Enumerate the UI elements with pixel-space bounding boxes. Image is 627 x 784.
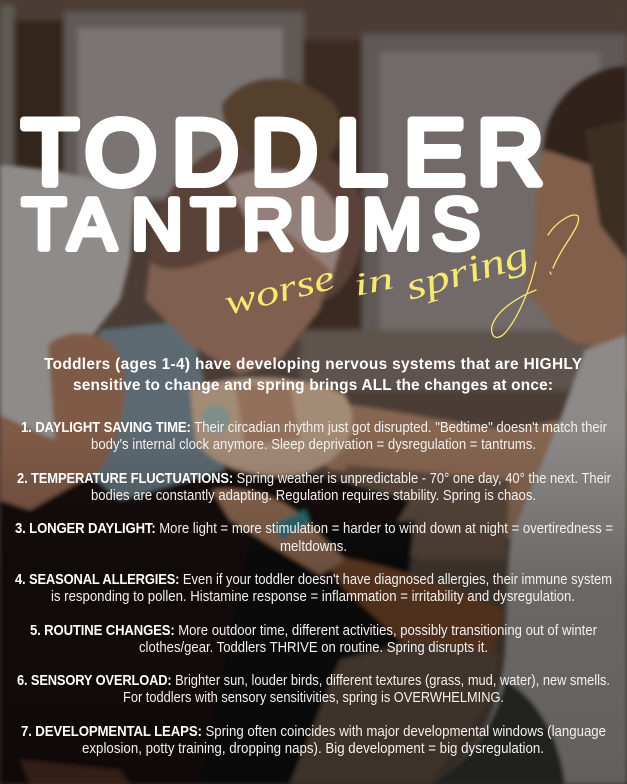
woman's head and hair	[149, 140, 365, 305]
chair and dark lower zone	[0, 450, 410, 784]
intro text: sensitive to change and spring brings ALL the changes at once:	[73, 377, 553, 394]
item 5: routine changes: 5. ROUTINE CHANGES: More outdoor time, different activities, possibly transitioning out of winter	[30, 623, 597, 639]
item 4: seasonal allergies	[15, 572, 612, 605]
title line: TODDLER: TODDLER	[22, 102, 543, 204]
item 6: sensory overload: For toddlers with sensory sensitivities, spring is OVERWHELMING.	[123, 690, 504, 706]
title line: TANTRUMS: TANTRUMS	[22, 185, 480, 265]
intro text: Toddlers (ages 1-4) have developing nervous systems that are HIGHLY	[44, 356, 583, 373]
item 2: temperature fluctuations: bodies are constantly adapting. Regulation requires stability. Spring is chaos.	[91, 488, 536, 504]
subtitle: worse in spring?	[220, 215, 579, 337]
item 4: seasonal allergies: is responding to pollen. Histamine response = inflammation = irritability and dysregulation.	[51, 589, 575, 605]
subtitle: worse in spring?: spring	[401, 234, 534, 309]
item 5: routine changes	[30, 623, 597, 656]
item 5: routine changes: clothes/gear. Toddlers THRIVE on routine. Spring disrupts it.	[139, 640, 488, 656]
title: Toddler Tantrums	[22, 102, 543, 265]
man's head	[540, 66, 627, 210]
subtitle: worse in spring?: worse	[220, 257, 339, 323]
man's shirt	[432, 335, 627, 784]
pacifier	[202, 405, 230, 433]
woman's shirt	[0, 165, 135, 440]
item 7: developmental leaps: explosion, potty training, dropping naps). Big development = big dysregulation.	[82, 741, 544, 757]
subtitle: worse in spring?: in	[350, 259, 397, 303]
item 3: longer daylight	[15, 521, 613, 555]
item 7: developmental leaps	[21, 724, 606, 757]
item 2: temperature fluctuations	[17, 471, 611, 504]
bracelet	[272, 510, 310, 540]
item 1: daylight saving time	[21, 420, 607, 453]
intro text	[44, 356, 583, 394]
item 1: daylight saving time: body's internal clock anymore. Sleep deprivation = dysregulation = tantrums.	[91, 437, 536, 453]
woman's arms	[0, 333, 125, 510]
item 3: longer daylight: meltdowns.	[280, 539, 347, 555]
child body	[60, 320, 225, 500]
man's arm	[240, 395, 560, 540]
item 6: sensory overload	[17, 673, 610, 706]
